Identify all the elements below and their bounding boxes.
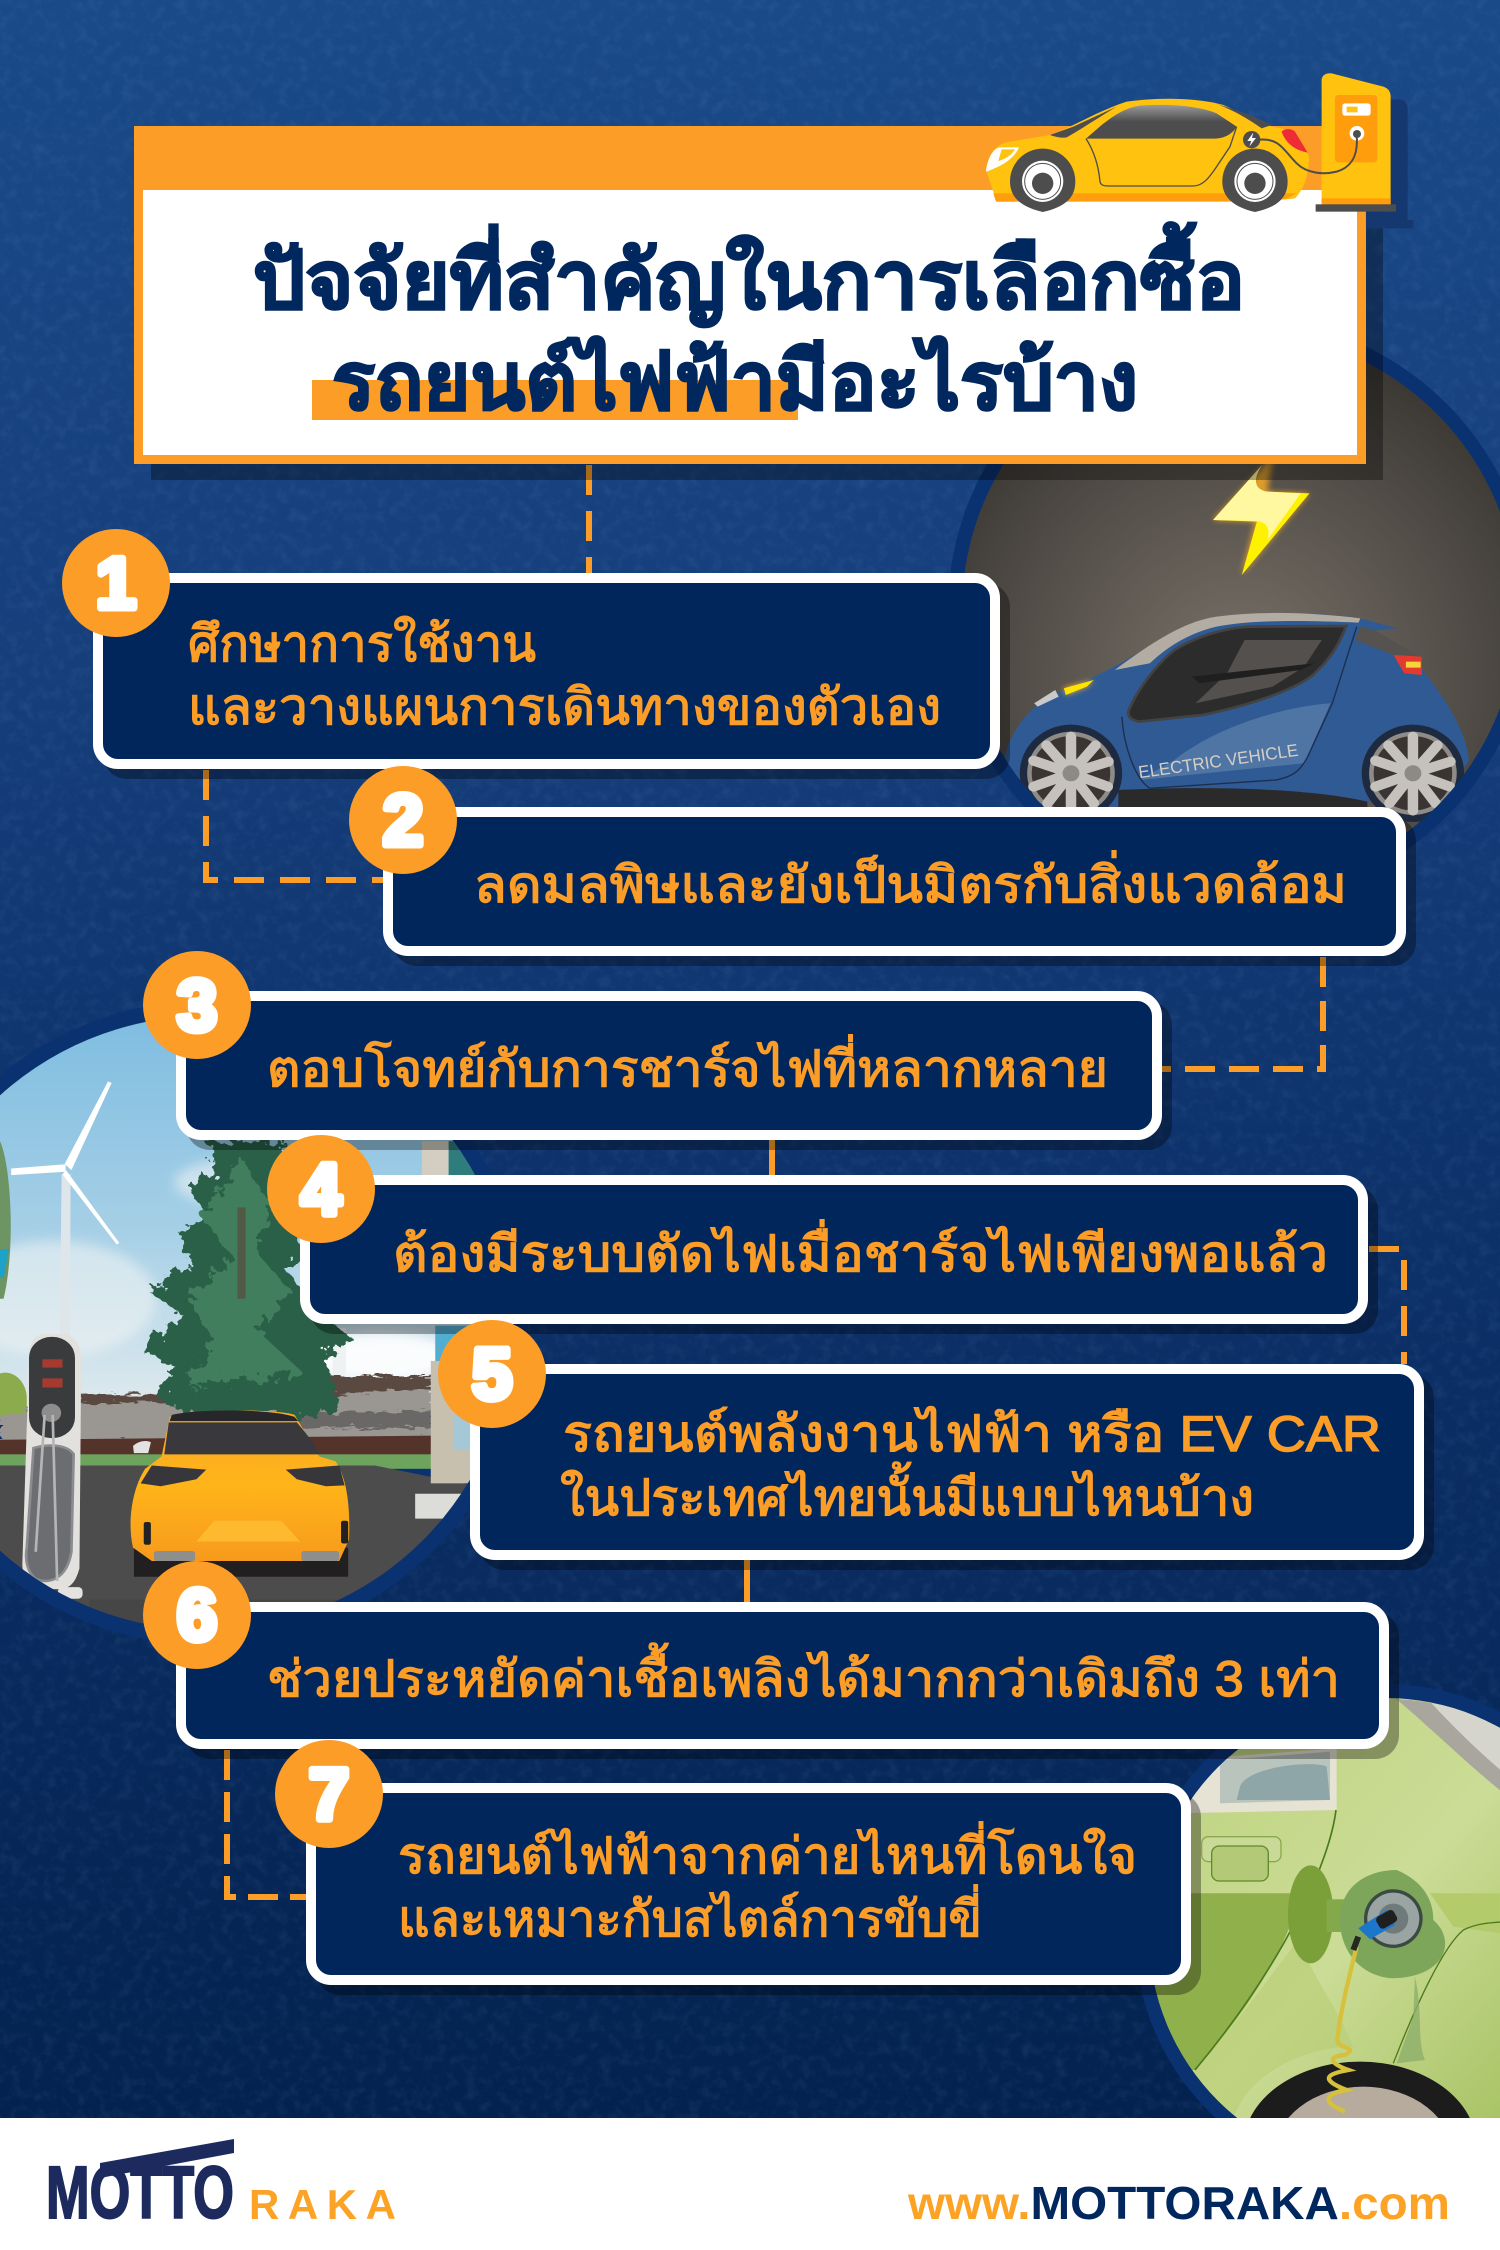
yellow car — [131, 1410, 349, 1577]
item 5 badge — [438, 1320, 546, 1428]
connector: item 4 to item 5 — [1369, 1249, 1404, 1364]
item 1 badge — [62, 529, 170, 637]
item 2 badge: 2 — [383, 781, 423, 861]
item 1 badge: 1 — [96, 544, 136, 624]
title highlight — [312, 380, 798, 420]
body shade — [1154, 1893, 1290, 2070]
icon: yellow car charging at station — [986, 73, 1413, 228]
wind turbine — [11, 1081, 120, 1276]
item 1 text: และวางแผนการเดินทางของตัวเอง — [188, 679, 941, 735]
item 5 text: ในประเทศไทยนั้นมีแบบไหนบ้าง — [560, 1462, 1254, 1526]
item 7 card — [275, 1740, 1201, 1995]
charging plug and cable — [1328, 1909, 1399, 2112]
item 7 badge — [275, 1740, 383, 1848]
item 1 text: ศึกษาการใช้งาน — [188, 616, 536, 672]
item 4 text: ต้องมีระบบตัดไฟเมื่อชาร์จไฟเพียงพอแล้ว — [393, 1220, 1328, 1282]
photo: yellow car at charging station with wind turbine — [0, 1008, 528, 1640]
item 7 text: รถยนต์ไฟฟ้าจากค่ายไหนที่โดนใจ — [398, 1822, 1137, 1884]
door handle — [1202, 1837, 1281, 1881]
item 3 text: ตอบโจทย์กับการชาร์จไฟที่หลากหลาย — [267, 1035, 1108, 1097]
item 2 badge — [349, 766, 457, 874]
item 2 text: ลดมลพิษและยังเป็นมิตรกับสิ่งแวดล้อม — [474, 851, 1347, 913]
pine tree — [138, 1141, 353, 1419]
blue car — [1004, 613, 1469, 822]
front wheel — [1020, 724, 1122, 807]
connector: title to item 1 — [586, 465, 592, 573]
title text: รถยนต์ไฟฟ้ามีอะไรบ้าง — [332, 335, 1138, 426]
item 6 badge: 6 — [177, 1576, 217, 1656]
photo: blue electric car under lightning bolt — [950, 347, 1500, 845]
item 2 card — [349, 766, 1416, 966]
connector: item 1 to item 2 — [206, 770, 385, 880]
rear wheel — [1362, 725, 1464, 822]
logo: Motto Raka — [46, 2139, 396, 2234]
door seam — [1195, 1810, 1336, 2070]
item 7 badge: 7 — [309, 1755, 349, 1835]
item 6 card — [143, 1561, 1399, 1759]
connector: item 6 to item 7 — [227, 1750, 306, 1897]
item 5 text — [560, 1406, 1381, 1526]
title text — [253, 222, 1245, 426]
item 4 badge: 4 — [301, 1150, 341, 1230]
item 7 text — [398, 1822, 1137, 1947]
item 1 text — [188, 616, 941, 735]
connector: item 2 to item 3 — [1162, 957, 1323, 1069]
icon: lightning bolt — [1213, 457, 1309, 575]
roof band — [1397, 1700, 1500, 1790]
item 4 card — [267, 1135, 1378, 1334]
website url: www.MOTTORAKA.com — [907, 2177, 1450, 2229]
title panel — [134, 126, 1383, 480]
footer band — [0, 2118, 1500, 2250]
item 7 text: และเหมาะกับสไตล์การขับขี่ — [398, 1885, 982, 1947]
label: electric vehicle: ELECTRIC VEHICLE — [1137, 740, 1300, 782]
door window — [1190, 1749, 1337, 1813]
title text: ปัจจัยที่สำคัญในการเลือกซื้อ — [253, 222, 1245, 327]
item 4 badge — [267, 1135, 375, 1243]
item 3 card — [143, 951, 1172, 1150]
item 6 badge — [143, 1561, 251, 1669]
socket — [1364, 1889, 1423, 1948]
rock wall — [0, 1375, 433, 1442]
fuel flap — [1288, 1865, 1445, 2063]
logo: Motto Raka: MOTTO — [46, 2151, 234, 2234]
item 3 badge — [143, 951, 251, 1059]
item 5 badge: 5 — [472, 1335, 512, 1415]
item 6 text: ช่วยประหยัดค่าเชื้อเพลิงได้มากกว่าเดิมถึง 3 เท่า — [267, 1643, 1340, 1707]
photo: green car with charging plug — [1140, 1684, 1500, 2118]
charger — [22, 1334, 83, 1599]
connector: item 3 to item 4 — [769, 1140, 775, 1176]
item 1 card — [62, 529, 1010, 779]
wheel — [1250, 2062, 1470, 2118]
item 5 card — [438, 1320, 1434, 1570]
item 5 text: รถยนต์พลังงานไฟฟ้า หรือ EV CAR — [563, 1406, 1381, 1462]
connector: item 5 to item 6 — [744, 1560, 750, 1602]
logo: Motto Raka: RAKA — [249, 2181, 396, 2228]
item 3 badge: 3 — [177, 966, 217, 1046]
